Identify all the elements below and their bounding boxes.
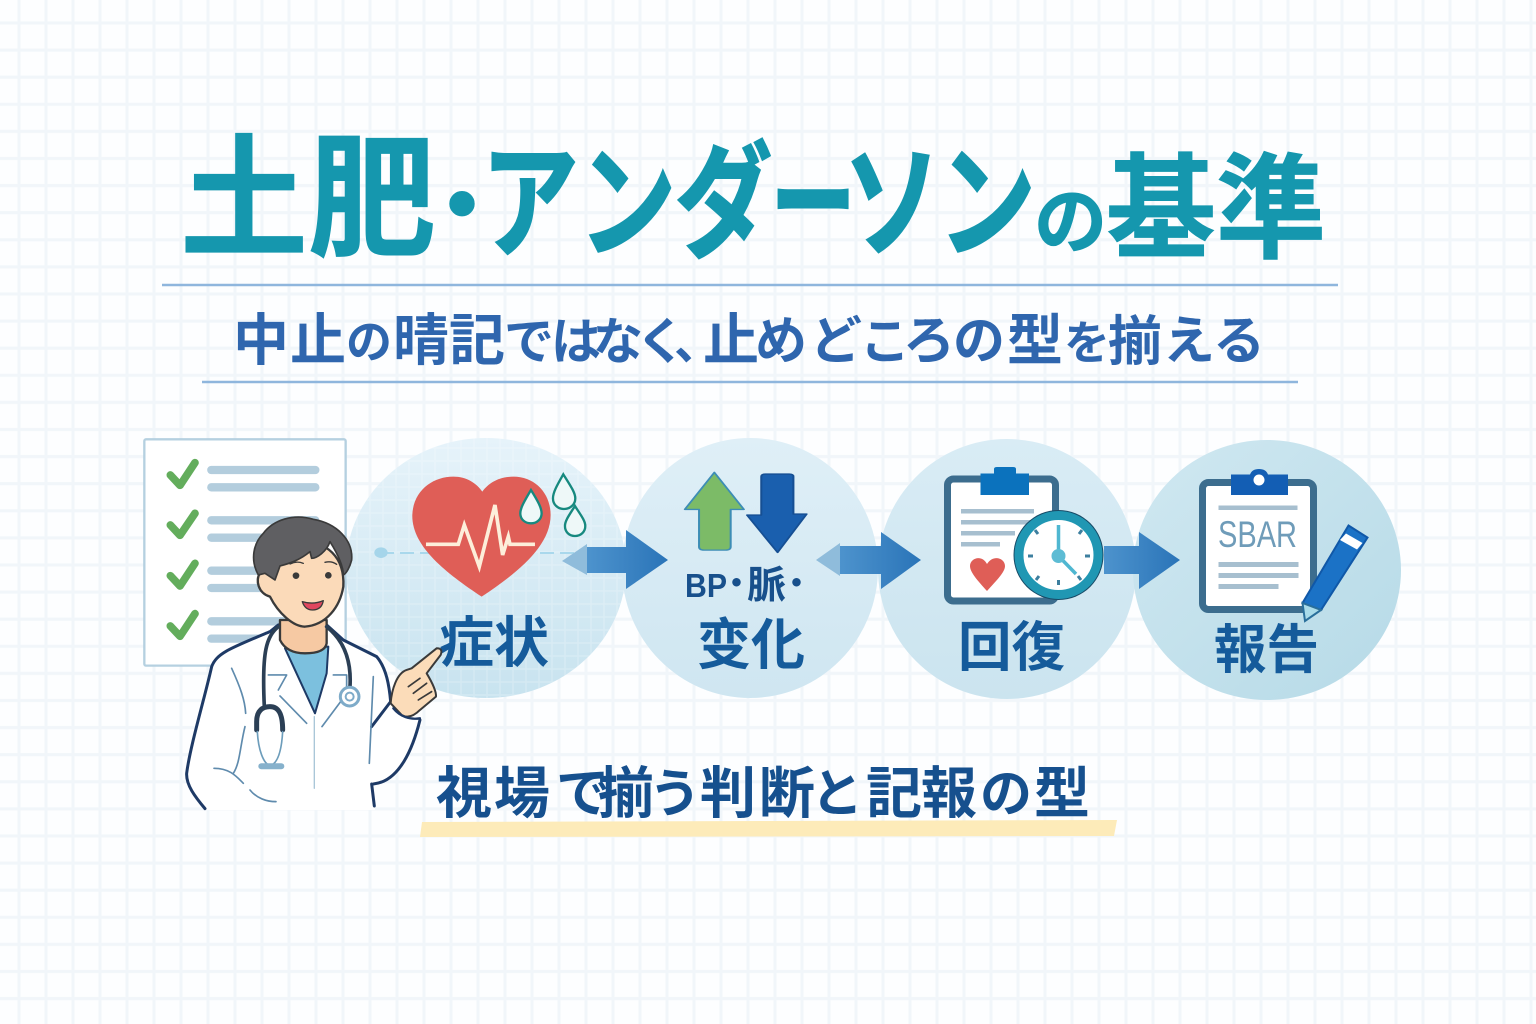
icon: clipboard with clock (948, 467, 1104, 601)
tagline: 報 (921, 762, 977, 825)
tagline: 揃 (598, 762, 654, 825)
hand (391, 648, 441, 717)
subtitle: く (636, 314, 686, 370)
illustration: doctor pointing (187, 517, 441, 810)
label: change: 变化 (697, 614, 805, 676)
subtitle: の (953, 313, 1005, 371)
tagline: 視 (436, 762, 492, 825)
icon: up and down arrows (685, 472, 807, 552)
label: BP and pulse: BP (685, 567, 727, 604)
title (180, 127, 1326, 275)
subtitle: こ (860, 314, 910, 370)
tagline: 型 (1034, 762, 1090, 825)
title: 土肥 (180, 127, 436, 275)
subtitle: は (551, 314, 601, 370)
panel: checklist (144, 439, 346, 666)
collar and coat seams (214, 668, 373, 802)
title: ソン (843, 134, 1036, 274)
ecg baseline (380, 552, 620, 554)
title: の (1034, 182, 1107, 263)
subtitle: の (346, 316, 392, 368)
arrow: 3 to 4 (1104, 532, 1180, 589)
tagline: で (556, 764, 610, 824)
subtitle: で (504, 314, 554, 370)
label: BP and pulse (685, 565, 813, 607)
arrow: 2 to 3 (816, 532, 921, 589)
tagline: の (980, 766, 1032, 824)
highlight bar (420, 820, 1117, 837)
tagline: 断 (759, 762, 815, 825)
label: BP and pulse: ・ (780, 565, 813, 602)
subtitle: え (1163, 313, 1215, 371)
tagline: 記 (866, 762, 922, 825)
label: symptoms: 症状 (439, 612, 549, 674)
label: BP and pulse: ・ (720, 565, 753, 602)
subtitle: ど (810, 313, 862, 371)
title: ・ (414, 154, 510, 261)
stethoscope (264, 627, 350, 707)
subtitle: 止 (703, 309, 759, 372)
panel: step 4 report (1133, 440, 1401, 700)
subtitle: 揃 (1108, 312, 1162, 372)
tagline: 判 (700, 762, 756, 825)
panel: step 2 change (622, 438, 878, 698)
subtitle: ろ (903, 313, 955, 371)
subtitle: を (1064, 317, 1110, 369)
label: BP and pulse: 脈 (747, 565, 786, 607)
label: report: 報告 (1214, 621, 1319, 680)
subtitle: る (1213, 313, 1265, 371)
title: アンダ (481, 134, 772, 274)
coat (187, 625, 420, 810)
title: ー (770, 134, 856, 274)
tagline: と (811, 766, 863, 824)
label: SBAR: SBAR (1218, 514, 1297, 555)
tagline: 場 (494, 762, 550, 825)
subtitle: め (755, 313, 807, 371)
arrow: 1 to 2 (562, 530, 668, 589)
tagline: う (649, 766, 701, 824)
neck and shirt (285, 647, 328, 713)
label: recovery: 回復 (958, 618, 1065, 678)
subtitle: 晴 (393, 309, 449, 372)
icon: heart with sweat drops (374, 474, 585, 597)
head (258, 540, 343, 627)
subtitle: 中 (233, 309, 289, 372)
panel: step 3 recovery (878, 439, 1136, 699)
subtitle: な (593, 314, 643, 370)
subtitle: 型 (1007, 309, 1063, 372)
panel: step 1 symptoms (346, 438, 626, 698)
title: 基準 (1106, 147, 1326, 274)
icon: SBAR clipboard with pen (1202, 469, 1368, 621)
subtitle: 、 (674, 317, 722, 370)
subtitle: 記 (449, 309, 505, 372)
subtitle: 止 (290, 309, 346, 372)
